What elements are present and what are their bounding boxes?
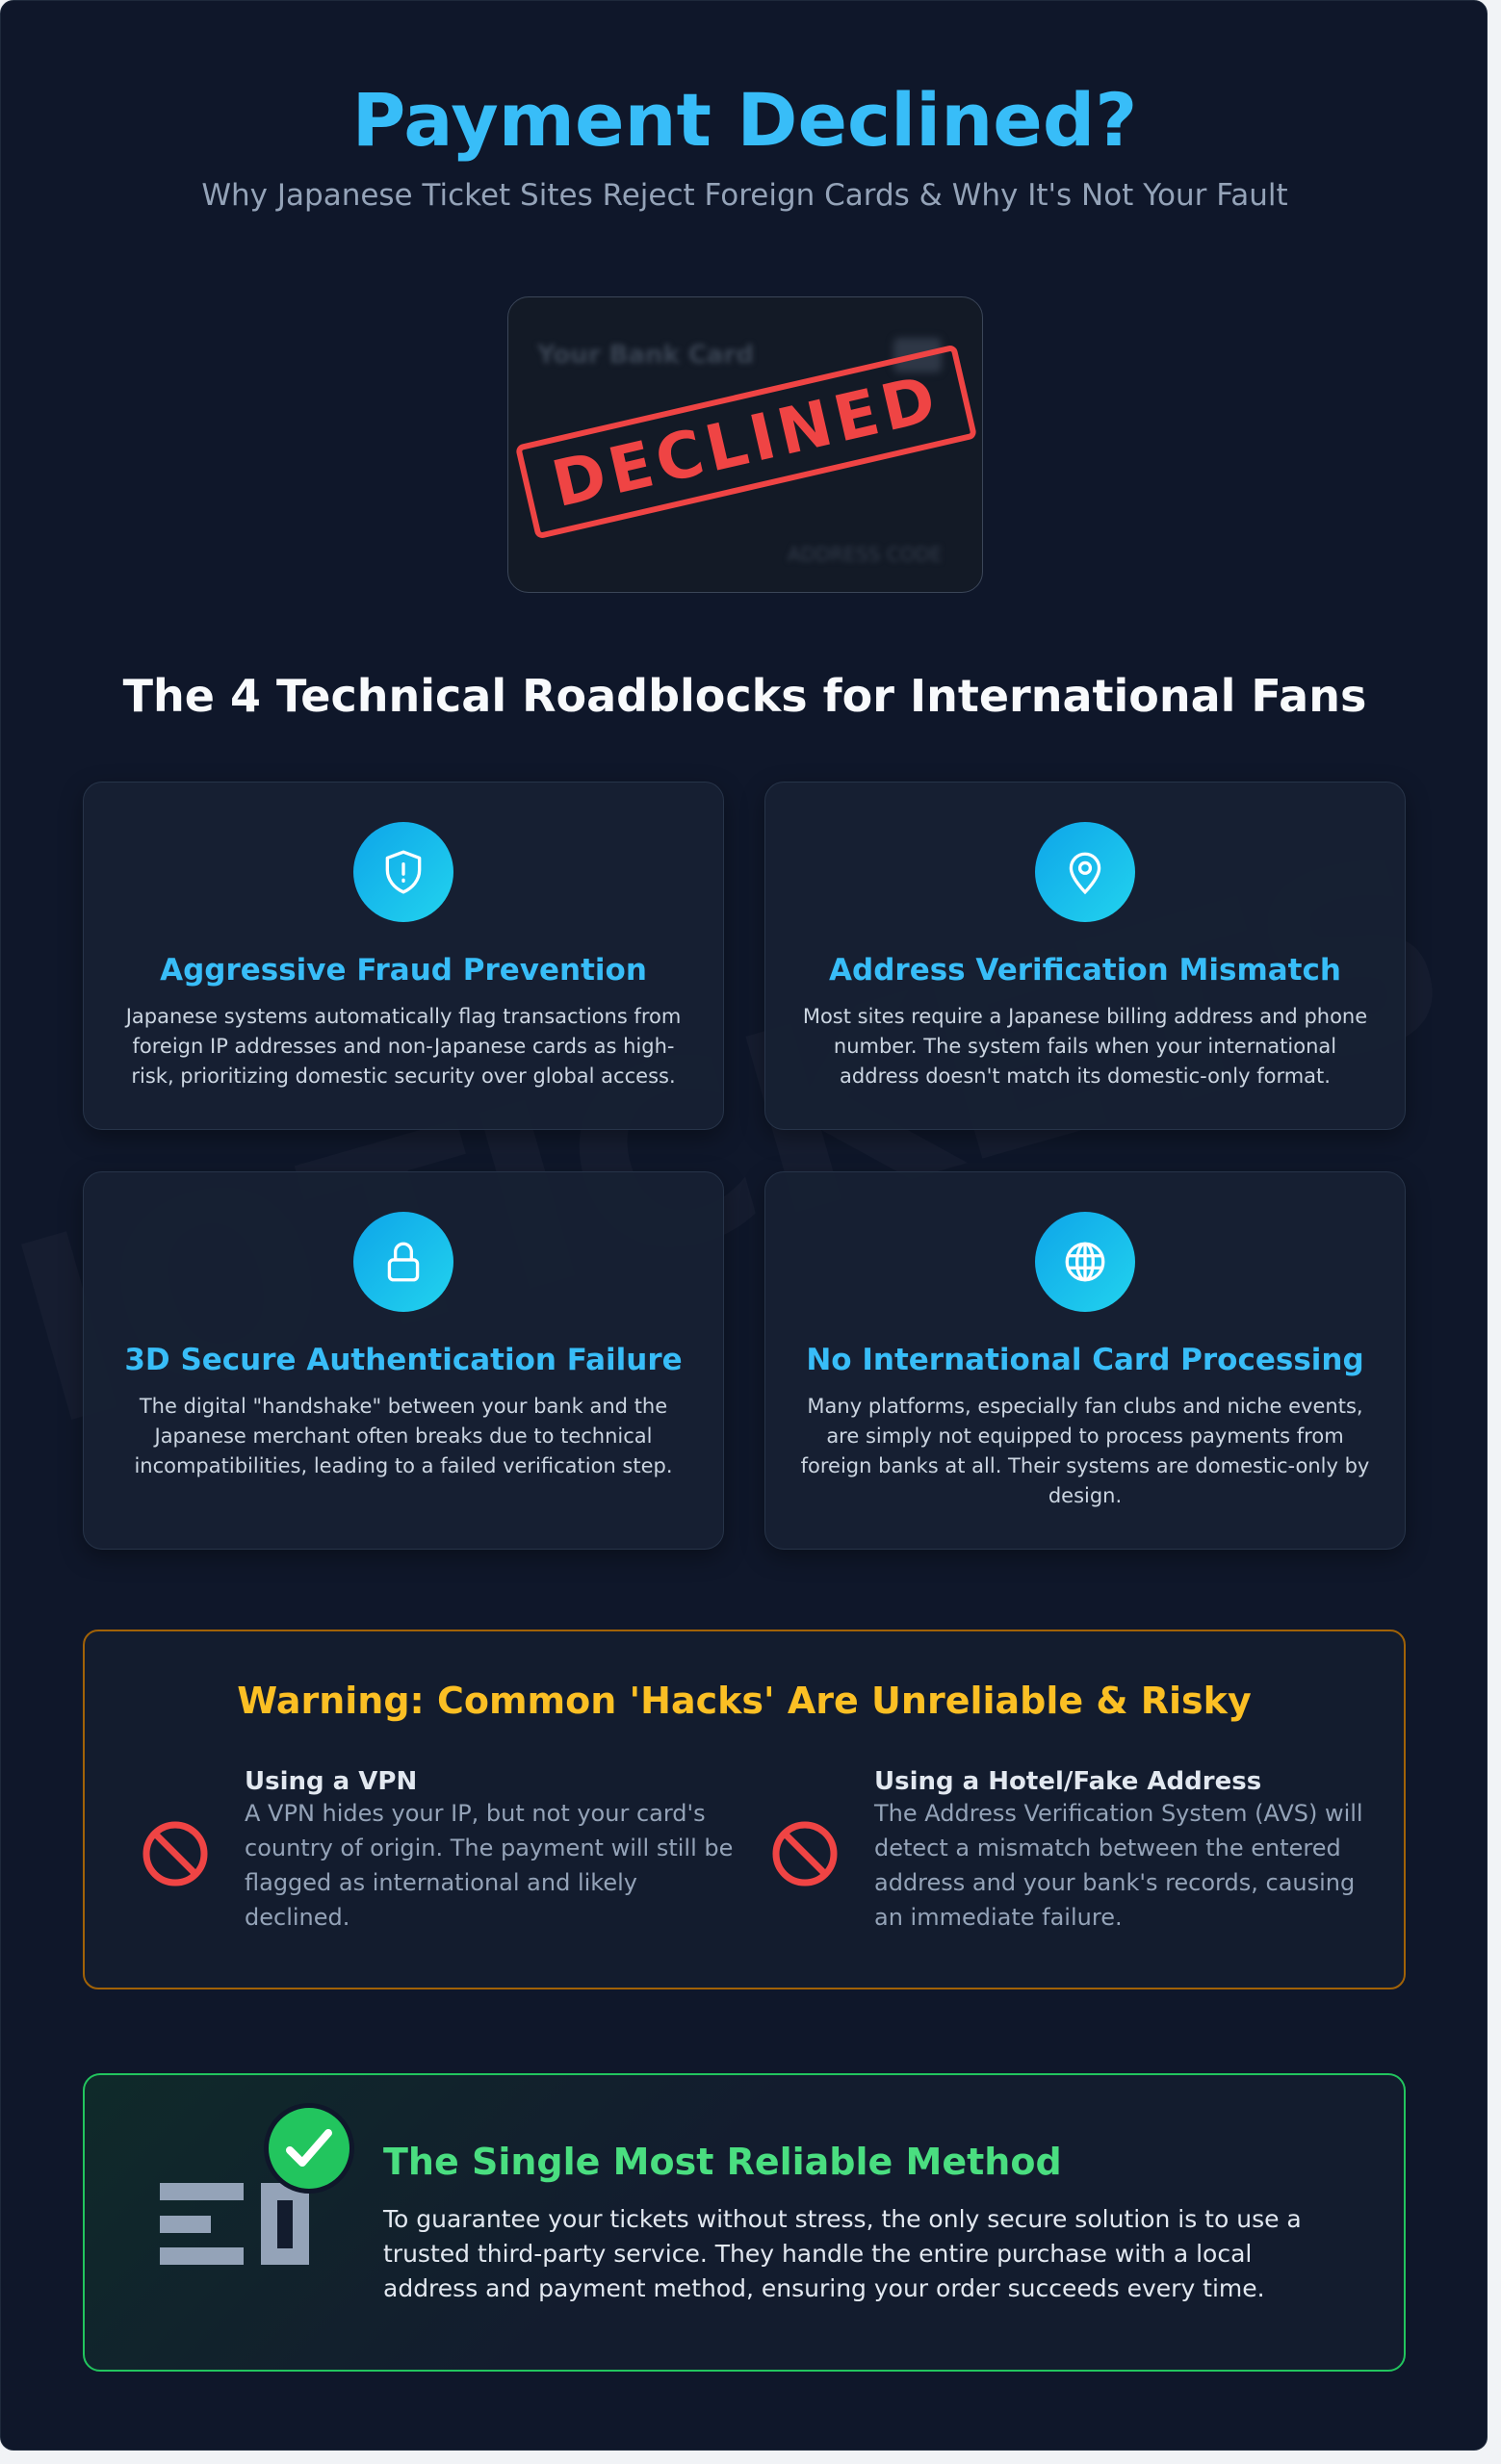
panel: 3D secure	[83, 1171, 724, 1550]
declined card: ADDRESS CODE	[788, 543, 943, 566]
item: fake address: The Address Verification System (AVS) will detect a mismatch between the entered address and your bank's records, causing an immediate failure.	[874, 1800, 1363, 1931]
icon: logo with check	[160, 2103, 354, 2265]
icon: location pin	[1035, 822, 1135, 922]
panel: address mismatch: Address Verification Mismatch	[829, 953, 1341, 988]
panel: warning	[83, 1630, 1406, 1989]
icon: shield	[353, 822, 453, 922]
panel: reliable method	[83, 2073, 1406, 2372]
icon: prohibited 2	[772, 1821, 838, 1886]
panel: no international processing	[764, 1171, 1406, 1550]
icon: lock	[353, 1212, 453, 1312]
panel: no international processing: No International Card Processing	[806, 1343, 1364, 1377]
panel: address mismatch	[764, 782, 1406, 1130]
item: VPN: A VPN hides your IP, but not your card's country of origin. The payment will still be flagged as international and likely declined.	[245, 1800, 733, 1931]
panel: fraud prevention: Japanese systems automatically flag transactions from foreign IP addresses and non-Japanese cards as high-risk, prioritizing domestic security over global access.	[126, 1005, 681, 1088]
panel: address mismatch: Most sites require a Japanese billing address and phone number. The system fails when your international address doesn't match its domestic-only format.	[803, 1005, 1367, 1088]
item: fake address: Using a Hotel/Fake Address	[874, 1767, 1261, 1796]
reliable heading: The Single Most Reliable Method	[383, 2141, 1062, 2183]
declined card	[507, 296, 983, 593]
panel: fraud prevention	[83, 782, 724, 1130]
watermark: IOTICKETS	[0, 799, 1479, 1483]
title: Payment Declined?	[352, 77, 1137, 163]
section heading: The 4 Technical Roadblocks for International Fans	[123, 670, 1366, 722]
item: VPN: Using a VPN	[245, 1767, 417, 1796]
panel: no international processing: Many platforms, especially fan clubs and niche events, are simply not equipped to process payments from foreign banks at all. Their systems are domestic-only by design.	[801, 1395, 1369, 1507]
warning heading: Warning: Common 'Hacks' Are Unreliable & Risky	[237, 1680, 1252, 1722]
panel: fraud prevention: Aggressive Fraud Prevention	[160, 953, 647, 988]
icon: globe	[1035, 1212, 1135, 1312]
blurred card text: Your Bank Card	[537, 341, 754, 370]
icon: prohibited 1	[142, 1821, 208, 1886]
subtitle: Why Japanese Ticket Sites Reject Foreign Cards & Why It's Not Your Fault	[201, 178, 1288, 213]
reliable body: To guarantee your tickets without stress, the only secure solution is to use a trusted third-party service. They handle the entire purchase with a local address and payment method, ensuring your order succeeds every time.	[383, 2205, 1302, 2302]
stamp: DECLINED: DECLINED	[545, 361, 946, 522]
panel: 3D secure: 3D Secure Authentication Failure	[124, 1343, 683, 1377]
panel: 3D secure: The digital "handshake" between your bank and the Japanese merchant often breaks due to technical incompatibilities, leading to a failed verification step.	[134, 1395, 673, 1477]
